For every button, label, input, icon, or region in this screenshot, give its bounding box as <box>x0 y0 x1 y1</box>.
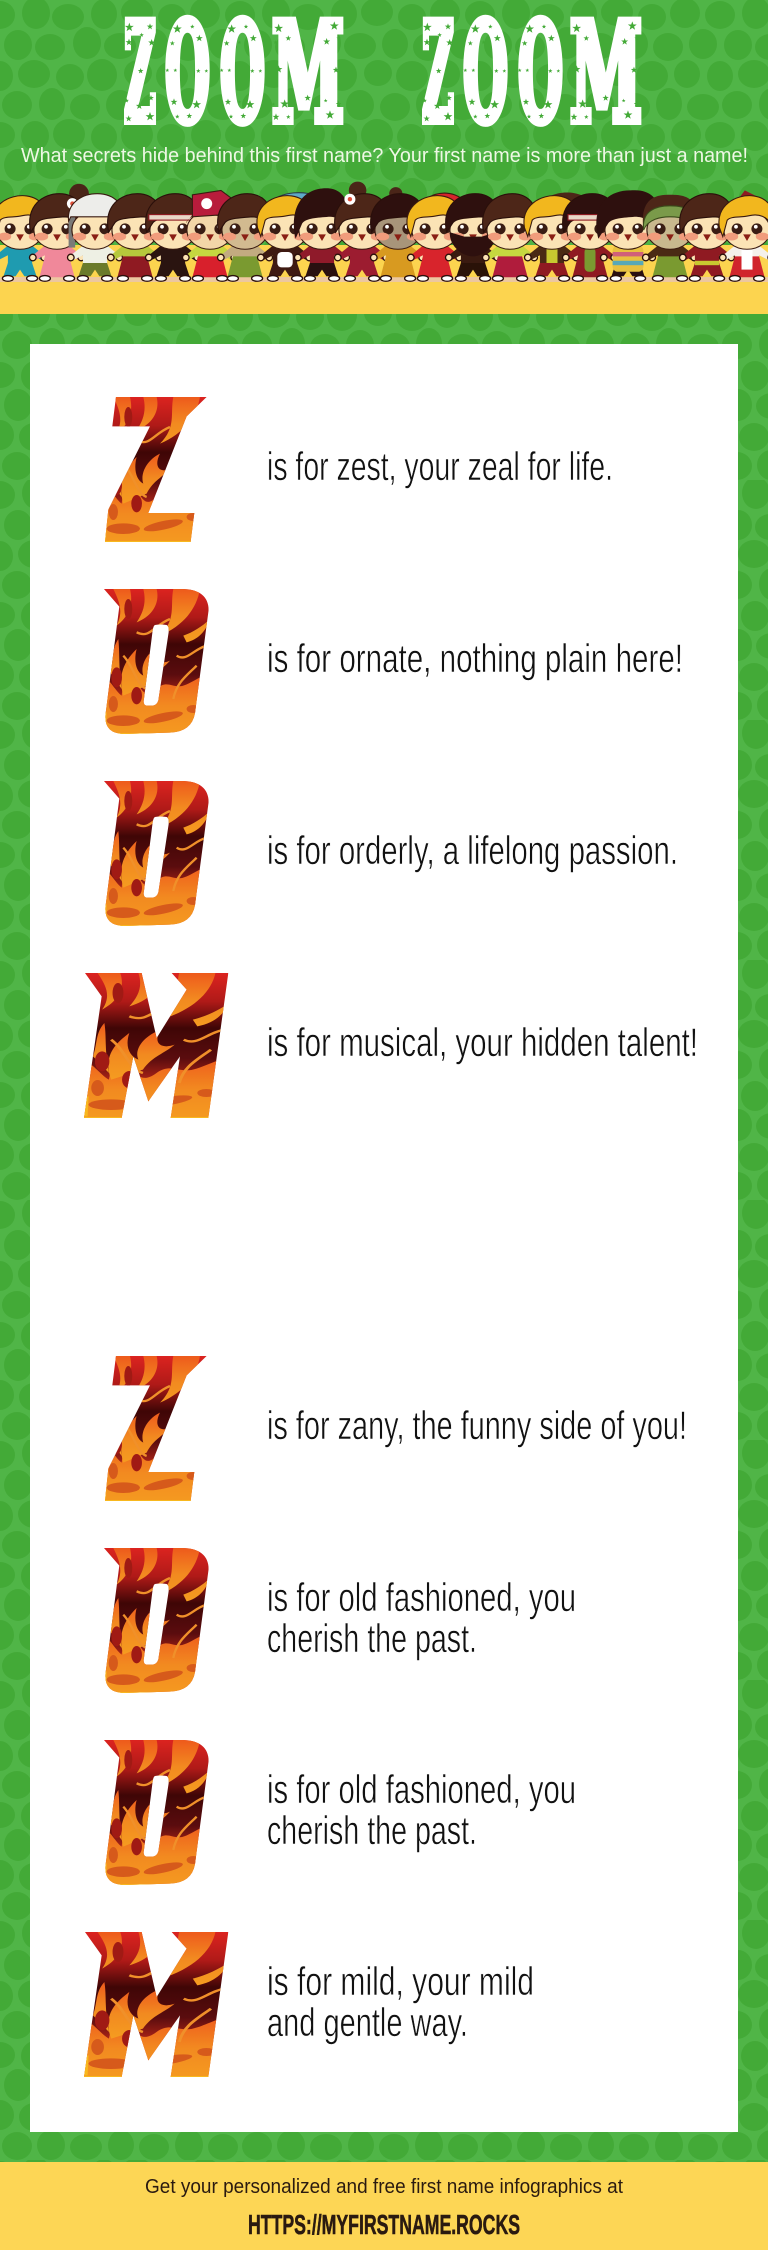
yellow ground band <box>0 245 768 314</box>
child 5 <box>146 194 200 281</box>
panel: white content card <box>30 344 738 2132</box>
letter O <box>100 1738 213 1890</box>
child 6 <box>182 190 239 281</box>
child 2 <box>30 184 89 281</box>
child 10 <box>334 182 390 281</box>
child 9 <box>294 188 350 281</box>
first name rows <box>79 395 698 1123</box>
child 16 <box>562 194 618 281</box>
child 4 <box>108 194 162 281</box>
footer url: HTTPS://MYFIRSTNAME.ROCKS <box>248 2209 520 2240</box>
text: old fashioned: cherish the past. <box>267 1809 477 1853</box>
text: old fashioned <box>267 1576 576 1661</box>
footer text: Get your personalized and free first name infographics at <box>145 2176 623 2198</box>
letter O <box>100 587 213 739</box>
letter M <box>79 1930 234 2082</box>
text: mild <box>267 1960 534 2045</box>
child 15 <box>524 193 589 281</box>
text: old fashioned <box>267 1768 576 1853</box>
child 12 <box>407 193 466 281</box>
child 17 <box>596 190 659 281</box>
title stars <box>124 21 639 121</box>
letter Z <box>100 395 213 547</box>
letter O <box>100 1546 213 1698</box>
child 8 <box>257 193 318 281</box>
text: mild: and gentle way. <box>267 2001 468 2045</box>
text: zest: is for zest, your zeal for life. <box>267 445 613 489</box>
footer band <box>0 2162 768 2250</box>
text: old fashioned: is for old fashioned, you <box>267 1768 576 1812</box>
letter M <box>79 971 234 1123</box>
child 11 <box>370 187 426 281</box>
child 1 <box>0 196 48 281</box>
child 3 <box>68 194 124 281</box>
second name rows <box>79 1354 687 2082</box>
child 14 <box>482 194 538 281</box>
text: old fashioned: cherish the past. <box>267 1617 477 1661</box>
title: second ZOOM <box>422 0 642 152</box>
illustrated row of children holding hands <box>0 182 768 281</box>
text: old fashioned: is for old fashioned, you <box>267 1576 576 1620</box>
child 19 <box>680 194 734 281</box>
title <box>124 0 642 152</box>
title: first ZOOM <box>124 0 344 152</box>
letter O <box>100 779 213 931</box>
text: mild: is for mild, your mild <box>267 1960 534 2004</box>
child 20 <box>719 190 768 281</box>
subtitle: What secrets hide behind this first name? Your first name is more than just a name! <box>21 145 748 167</box>
letter Z <box>100 1354 213 1506</box>
child 18 <box>642 195 698 281</box>
child 13 <box>446 194 500 281</box>
child 7 <box>218 194 272 281</box>
